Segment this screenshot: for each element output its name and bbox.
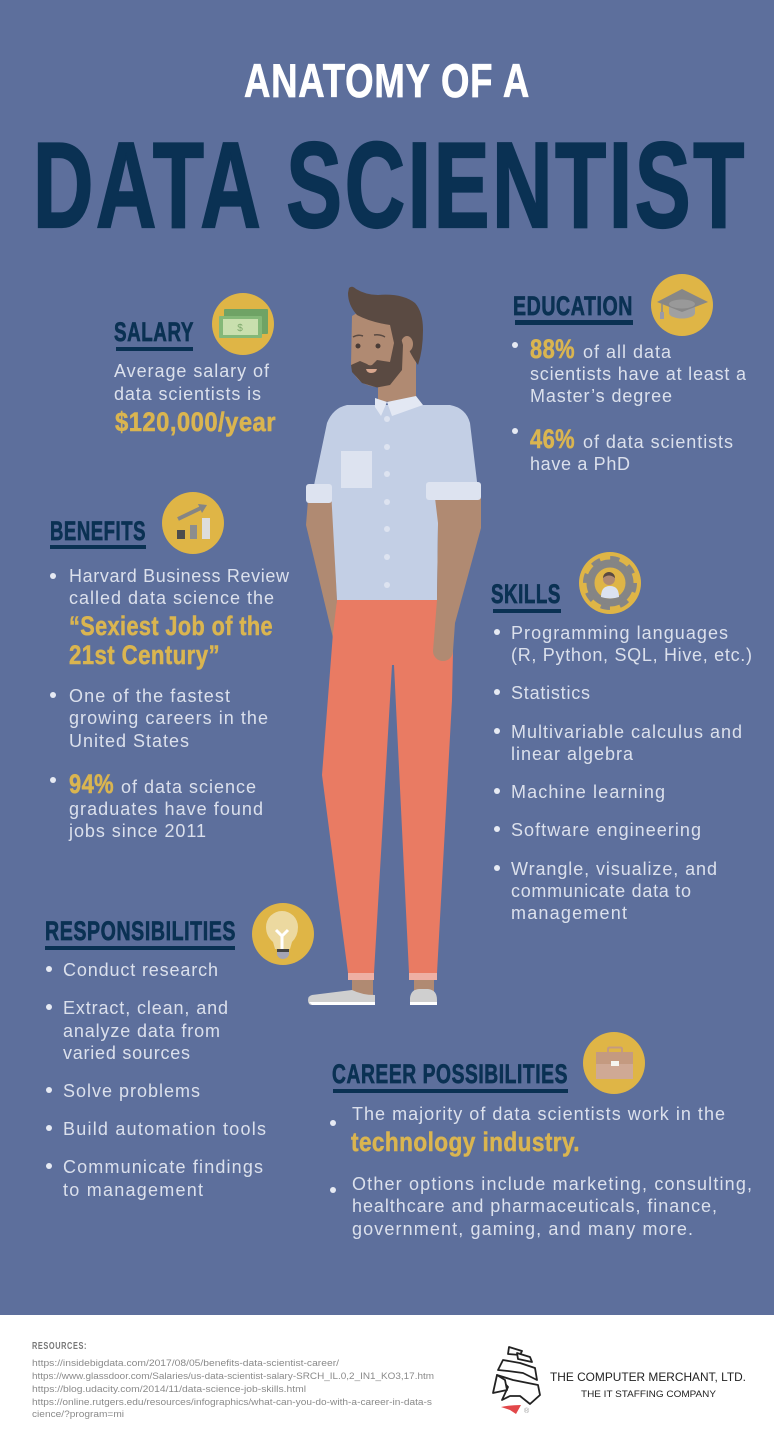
benefits bullets: called data science the: [69, 588, 274, 608]
neck: [378, 350, 416, 402]
trouser cuffs: [348, 973, 437, 980]
skills bullets: Machine learning: [511, 782, 665, 802]
responsibilities bullets: Build automation tools: [63, 1119, 266, 1139]
heading: salary: SALARY: [114, 317, 194, 347]
shirt pocket: [341, 451, 372, 488]
benefits bullets: [50, 566, 290, 841]
skills bullets: Wrangle, visualize, and: [511, 859, 717, 879]
education bullets: Master’s degree: [530, 386, 672, 406]
benefits bullets: “Sexiest Job of the: [69, 611, 273, 641]
logo text: [550, 1370, 746, 1400]
skills bullets: (R, Python, SQL, Hive, etc.): [511, 645, 752, 665]
right arm: [433, 498, 481, 661]
benefits bullets: 94%: [69, 769, 114, 799]
education bullets: have a PhD: [530, 454, 630, 474]
heading: career possibilities: [332, 1059, 568, 1093]
responsibilities bullets: to management: [63, 1180, 203, 1200]
benefits bullets: 21st Century”: [69, 640, 220, 670]
icon: growth chart: [162, 492, 224, 554]
salary text: [114, 361, 276, 437]
panel: benefits: [50, 492, 290, 841]
eyes: [356, 344, 380, 348]
responsibilities bullets: Communicate findings: [63, 1157, 263, 1177]
responsibilities bullets: Solve problems: [63, 1081, 200, 1101]
education bullets: [512, 334, 747, 474]
heading: skills: [491, 579, 561, 613]
left sleeve cuff: [306, 484, 332, 503]
salary text: Average salary of: [114, 361, 270, 381]
logo: ship: ®: [524, 1407, 530, 1415]
heading: career possibilities: CAREER POSSIBILITIES: [332, 1059, 568, 1089]
salary text: data scientists is: [114, 384, 261, 404]
resources: [32, 1341, 434, 1420]
panel: skills: [491, 552, 752, 923]
skills bullets: Multivariable calculus and: [511, 722, 742, 742]
right sleeve cuff: [426, 482, 481, 500]
resources: RESOURCES:: [32, 1341, 87, 1352]
icon: light bulb: [252, 903, 314, 965]
resources: https://online.rutgers.edu/resources/infographics/what-can-you-do-with-a-career-in-data-s: [32, 1397, 432, 1408]
career text: Other options include marketing, consulting,: [352, 1174, 752, 1194]
face: [351, 305, 405, 387]
responsibilities bullets: Extract, clean, and: [63, 998, 228, 1018]
heading: responsibilities: [45, 916, 236, 950]
heading: responsibilities: RESPONSIBILITIES: [45, 916, 236, 946]
resources: cience/?program=mi: [32, 1409, 124, 1420]
education bullets: scientists have at least a: [530, 364, 747, 384]
panel: salary: [114, 293, 276, 437]
benefits bullets: One of the fastest: [69, 686, 230, 706]
career text: The majority of data scientists work in the: [352, 1104, 725, 1124]
beard: [351, 338, 403, 388]
icon: money: [212, 293, 274, 355]
panel: responsibilities: [45, 903, 314, 1200]
responsibilities bullets: Conduct research: [63, 960, 218, 980]
skills bullets: Software engineering: [511, 820, 701, 840]
eyebrows: [353, 335, 385, 337]
title: [33, 54, 747, 253]
salary text: $120,000/year: [115, 407, 276, 437]
responsibilities bullets: [46, 960, 266, 1200]
logo text: THE IT STAFFING COMPANY: [581, 1389, 717, 1400]
resources: https://www.glassdoor.com/Salaries/us-data-scientist-salary-SRCH_IL.0,2_IN1_KO3,17.htm: [32, 1371, 434, 1382]
trousers: [322, 600, 453, 973]
title: ANATOMY OF A: [244, 54, 530, 107]
logo: ship: [493, 1347, 540, 1415]
benefits bullets: Harvard Business Review: [69, 566, 290, 586]
panel: career possibilities: [330, 1032, 752, 1239]
career text: [330, 1104, 752, 1239]
responsibilities bullets: varied sources: [63, 1043, 190, 1063]
footer: [0, 1315, 774, 1442]
ankles: [352, 980, 434, 996]
heading: benefits: [50, 516, 146, 549]
ear: [401, 336, 413, 352]
benefits bullets: of data science: [121, 777, 256, 797]
skills bullets: Statistics: [511, 683, 590, 703]
panel: education: [512, 274, 747, 474]
shirt buttons: [384, 416, 390, 588]
career text: government, gaming, and many more.: [352, 1219, 693, 1239]
career text: healthcare and pharmaceuticals, finance,: [352, 1196, 717, 1216]
left arm: [306, 500, 337, 642]
right shoe: [410, 989, 437, 1005]
benefits bullets: growing careers in the: [69, 708, 268, 728]
skills bullets: Programming languages: [511, 623, 728, 643]
icon: money: $: [237, 323, 243, 334]
benefits bullets: United States: [69, 731, 189, 751]
resources: https://blog.udacity.com/2014/11/data-science-job-skills.html: [32, 1384, 306, 1395]
heading: salary: [114, 317, 194, 351]
hair: [348, 287, 423, 365]
skills bullets: linear algebra: [511, 744, 634, 764]
skills bullets: management: [511, 903, 627, 923]
shirt: [313, 405, 478, 600]
career text: technology industry.: [351, 1127, 580, 1157]
benefits bullets: graduates have found: [69, 799, 263, 819]
education bullets: 46%: [530, 424, 575, 454]
responsibilities bullets: analyze data from: [63, 1021, 220, 1041]
logo text: THE COMPUTER MERCHANT, LTD.: [550, 1370, 746, 1384]
skills bullets: [494, 623, 752, 923]
skills bullets: communicate data to: [511, 881, 691, 901]
heading: skills: SKILLS: [491, 579, 561, 609]
left shoe: [308, 990, 375, 1005]
heading: education: [513, 291, 633, 325]
shoe soles: [309, 1002, 437, 1005]
education bullets: 88%: [530, 334, 575, 364]
education bullets: of data scientists: [583, 432, 733, 452]
heading: education: EDUCATION: [513, 291, 633, 321]
icon: briefcase: [583, 1032, 645, 1094]
education bullets: of all data: [583, 342, 672, 362]
icon: graduation cap: [651, 274, 713, 336]
benefits bullets: jobs since 2011: [68, 821, 206, 841]
heading: benefits: BENEFITS: [50, 516, 146, 546]
collar: [375, 396, 423, 416]
icon: gear with person: [579, 552, 641, 614]
figure: data scientist: [306, 287, 481, 1005]
resources: https://insidebigdata.com/2017/08/05/benefits-data-scientist-career/: [32, 1358, 339, 1369]
mouth: [366, 369, 377, 373]
